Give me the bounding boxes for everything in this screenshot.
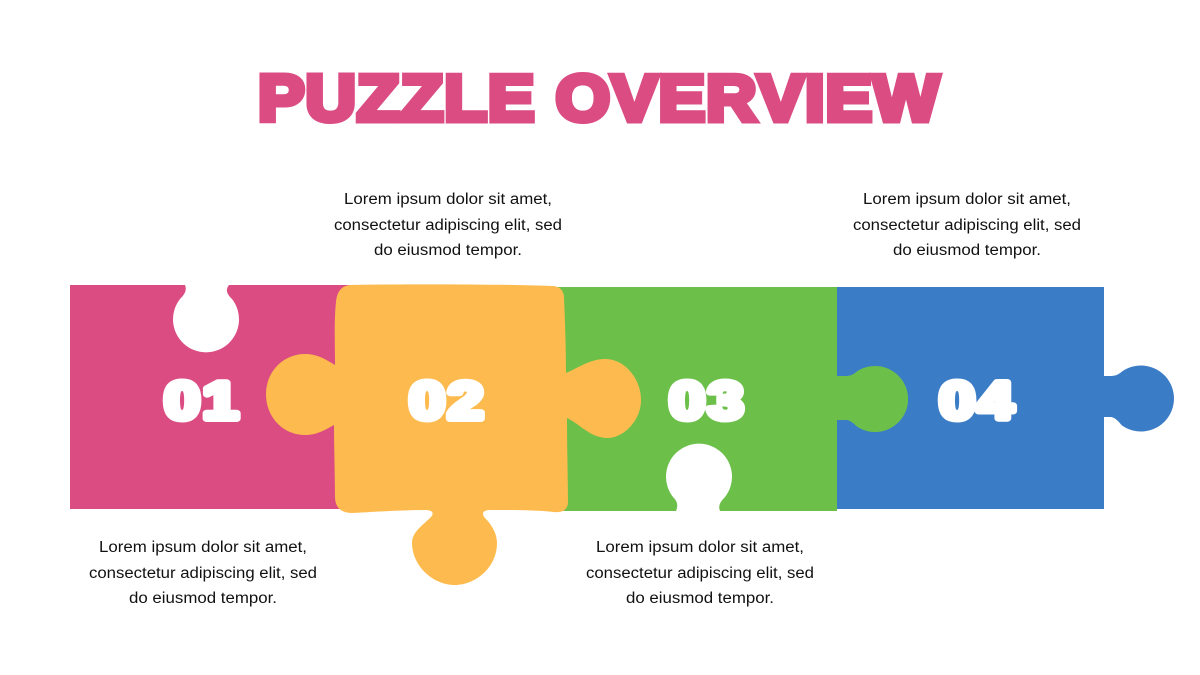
text block: piece 4 description: consectetur adipiscing elit, sed xyxy=(853,217,1081,234)
text block: piece 2 description xyxy=(334,191,562,259)
number 02: 02 xyxy=(410,372,486,430)
number 03: 03 xyxy=(670,372,746,430)
puzzle piece 2: orange xyxy=(266,284,641,585)
puzzle piece 3: green xyxy=(555,287,908,511)
text block: piece 2 description: do eiusmod tempor. xyxy=(374,242,522,259)
number 01: 01 xyxy=(164,372,241,430)
puzzle piece 4: blue xyxy=(837,287,1174,509)
text block: piece 3 description: consectetur adipiscing elit, sed xyxy=(586,565,814,582)
number 04: 04 xyxy=(940,372,1016,430)
text block: piece 4 description: Lorem ipsum dolor sit amet, xyxy=(863,191,1071,208)
text block: piece 4 description: do eiusmod tempor. xyxy=(893,242,1041,259)
text block: piece 1 description xyxy=(89,539,317,607)
text block: piece 4 description xyxy=(853,191,1081,259)
text block: piece 1 description: do eiusmod tempor. xyxy=(129,590,277,607)
text block: piece 3 description xyxy=(586,539,814,607)
text block: piece 2 description: Lorem ipsum dolor sit amet, xyxy=(344,191,552,208)
text block: piece 2 description: consectetur adipiscing elit, sed xyxy=(334,217,562,234)
text block: piece 3 description: do eiusmod tempor. xyxy=(626,590,774,607)
title: PUZZLE OVERVIEW xyxy=(258,63,940,135)
text block: piece 3 description: Lorem ipsum dolor sit amet, xyxy=(596,539,804,556)
text block: piece 1 description: Lorem ipsum dolor sit amet, xyxy=(99,539,307,556)
text block: piece 1 description: consectetur adipiscing elit, sed xyxy=(89,565,317,582)
puzzle piece 1: pink xyxy=(70,285,350,509)
